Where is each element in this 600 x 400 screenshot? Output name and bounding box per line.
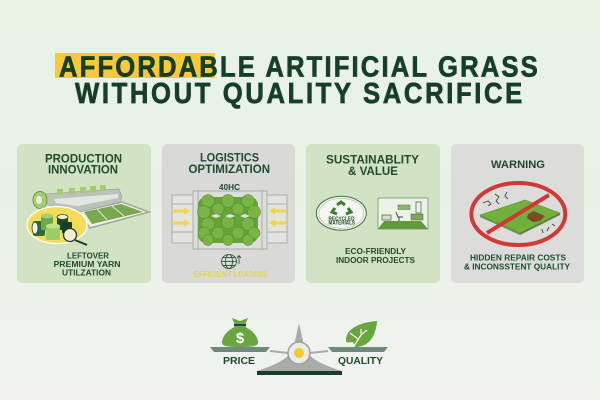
heading: production innovation: INNOVATION	[48, 164, 118, 177]
icon: money bag	[222, 318, 258, 347]
icon: recycle symbol	[332, 202, 351, 214]
illustration: yarn spools	[27, 206, 87, 245]
heading: logistics optimization: LOGISTICS	[200, 152, 259, 165]
panel: logistics optimization	[162, 144, 295, 283]
label: 40HC: 40HC	[219, 183, 240, 192]
badge: recycled materials: MATERIALS	[328, 220, 356, 226]
left pan	[210, 347, 270, 352]
caption: leftover premium yarn utilization: LEFTOVER	[67, 251, 109, 260]
caption: hidden repair costs: & INCONSSTENT QUALITY	[464, 262, 571, 272]
heading: production innovation: PRODUCTION	[45, 153, 122, 166]
icon: money bag: $	[236, 330, 245, 347]
heading: sustainability and value: & VALUE	[348, 165, 398, 178]
heading: production innovation	[45, 153, 122, 177]
right pan	[328, 347, 388, 352]
caption: efficient loading: EFFICIENT LOADING	[194, 270, 267, 279]
scale base	[257, 323, 342, 375]
caption: eco-friendly indoor projects: ECO-FRIENDLY	[345, 247, 407, 256]
illustration: green room	[378, 198, 428, 229]
caption: hidden repair costs	[464, 254, 571, 272]
heading: logistics optimization	[188, 152, 270, 176]
icon: globe	[222, 254, 241, 268]
label: quality: QUALITY	[338, 355, 383, 367]
caption: eco-friendly indoor projects: INDOOR PROJECTS	[336, 256, 416, 265]
illustration: container with rolls	[172, 190, 287, 250]
badge: recycled materials	[316, 196, 366, 230]
panel: warning	[451, 144, 584, 283]
heading: warning: WARNING	[491, 159, 545, 171]
caption: eco-friendly indoor projects	[336, 247, 416, 265]
caption: hidden repair costs: HIDDEN REPAIR COSTS	[470, 254, 567, 263]
caption: leftover premium yarn utilization	[54, 251, 121, 278]
caption: leftover premium yarn utilization: PREMIUM YARN	[54, 260, 121, 269]
heading: sustainability and value	[326, 153, 419, 178]
title: WITHOUT QUALITY SACRIFICE	[75, 77, 522, 109]
heading: logistics optimization: OPTIMIZATION	[188, 163, 270, 176]
illustration: tufting machine	[33, 185, 149, 228]
panel: sustainability and value	[306, 144, 440, 283]
caption: leftover premium yarn utilization: UTILZATION	[62, 268, 111, 278]
title: AFFORDABLE ARTIFICIAL GRASS	[59, 50, 538, 83]
badge: recycled materials: RECYCLED	[328, 216, 355, 222]
panel: production innovation	[17, 144, 151, 283]
icon: leaf	[346, 321, 377, 347]
illustration: damaged turf prohibited	[471, 183, 565, 245]
label: price: PRICE	[223, 355, 255, 367]
title	[55, 50, 538, 109]
heading: sustainability and value: SUSTAINABLITY	[326, 153, 419, 166]
balance scale	[210, 318, 388, 375]
